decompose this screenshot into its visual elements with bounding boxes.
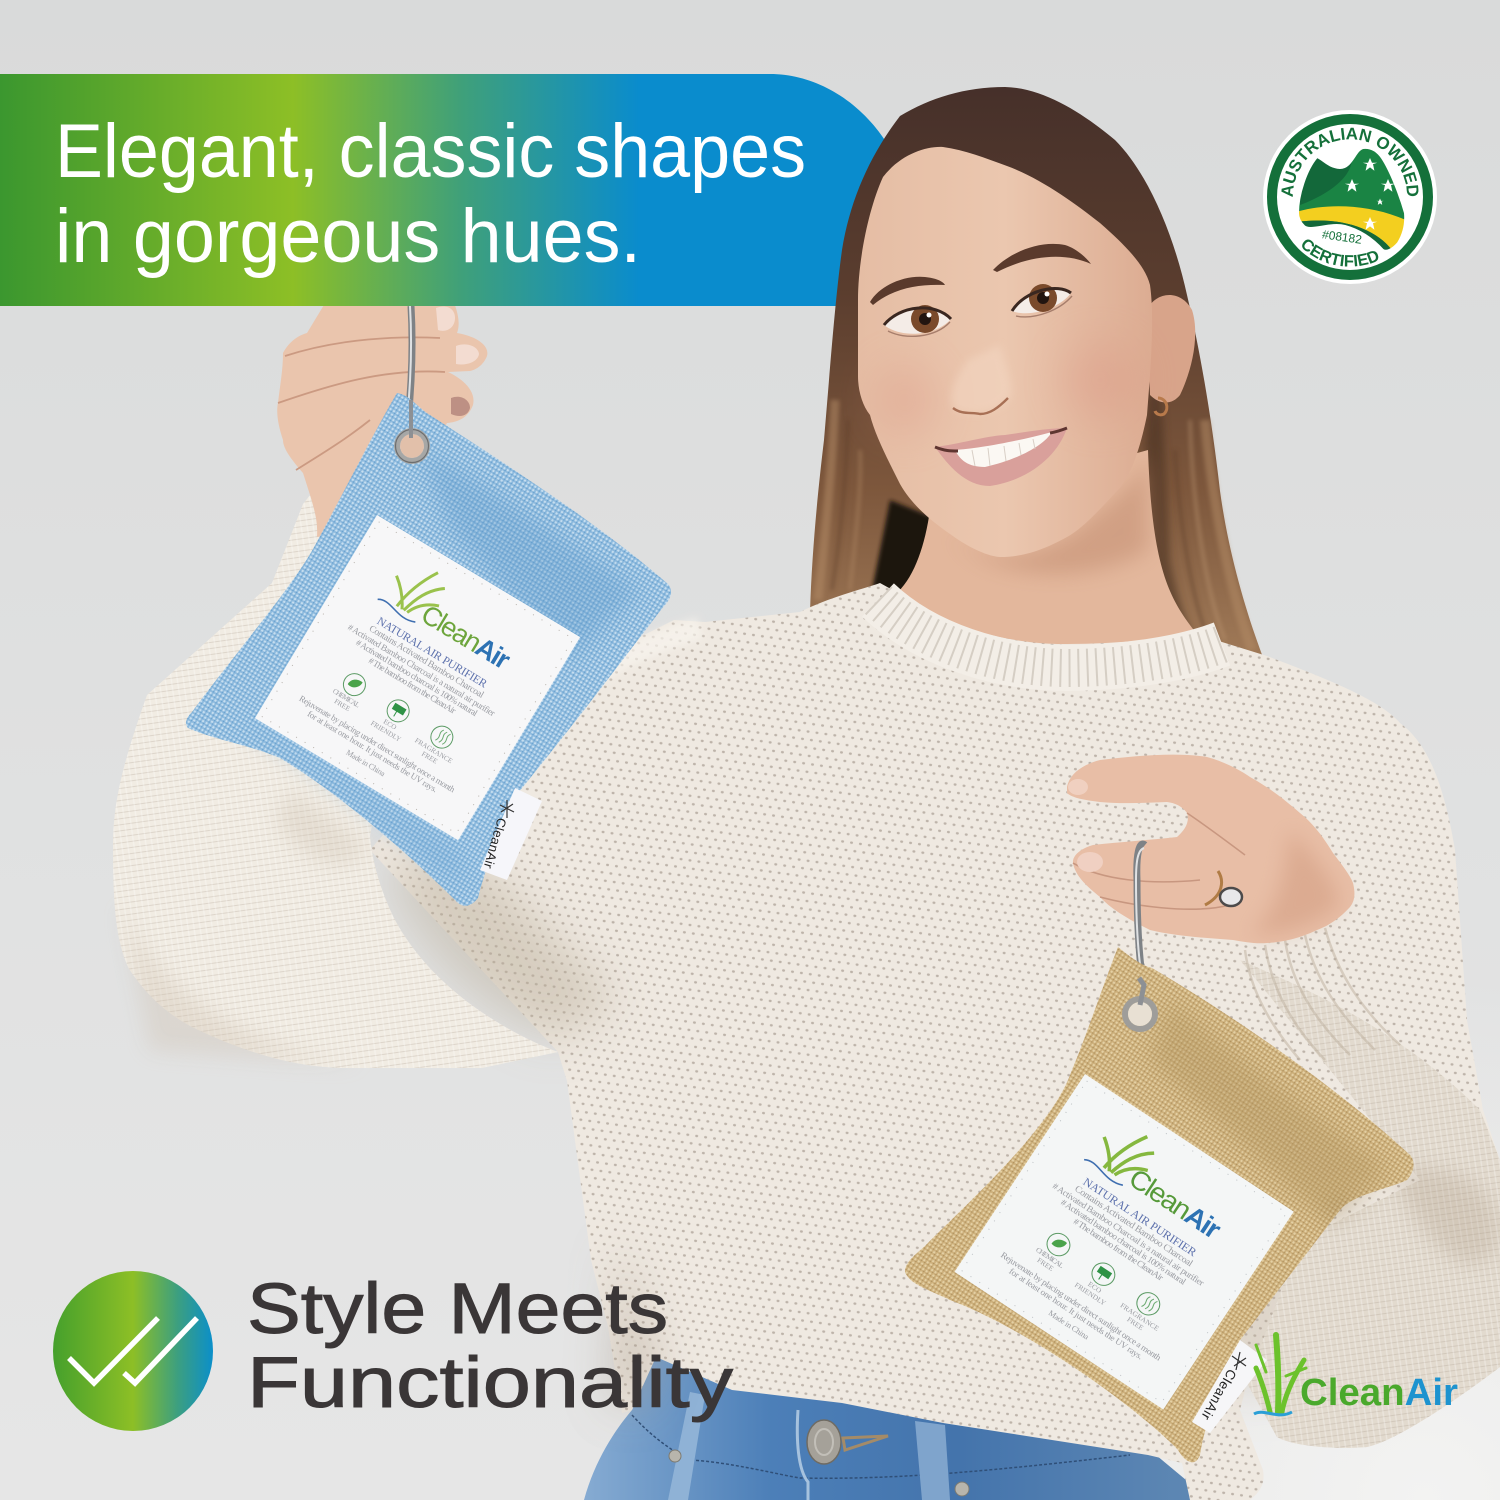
right hand — [1067, 755, 1354, 943]
label logo: CleanAir — [416, 599, 516, 676]
label text — [286, 601, 513, 814]
shoulder highlight — [570, 628, 700, 690]
label text: Made in China — [344, 748, 387, 778]
left hand — [277, 300, 487, 537]
logo water — [1254, 1412, 1292, 1415]
eyebrows — [870, 244, 1091, 305]
eye: left — [884, 305, 951, 336]
label text: # Activated bamboo charcoal is 100% natural — [1059, 1198, 1188, 1288]
belt loops — [668, 1392, 705, 1500]
label text: NATURAL AIR PURIFIER — [375, 615, 489, 691]
badge arc text: AUSTRALIAN OWNED — [1281, 128, 1418, 197]
badge map — [1299, 148, 1404, 250]
nose — [951, 345, 1011, 414]
button — [807, 1420, 841, 1464]
label text: Contains Activated Bamboo Charcoal — [367, 624, 486, 701]
neck — [898, 450, 1197, 646]
tan bag grommet — [1125, 978, 1155, 1029]
blue bag shading — [240, 450, 640, 890]
banner heading: Elegant, classic shapes — [55, 109, 806, 194]
chin shadow — [935, 450, 1148, 574]
blue bag tag: CleanAir — [481, 816, 510, 871]
waistband seam — [632, 1415, 1130, 1478]
callout: Style Meets Functionality — [53, 1270, 734, 1431]
label logo — [1083, 1115, 1241, 1245]
badge arc text — [1281, 128, 1418, 266]
label icons — [339, 670, 457, 752]
banner heading: in gorgeous hues. — [55, 194, 641, 279]
label text: Contains Activated Bamboo Charcoal — [1072, 1184, 1195, 1269]
right sleeve knit — [1240, 960, 1500, 1448]
label text: Rejuvenate by placing under direct sunlight once a month — [999, 1250, 1163, 1363]
label text: ECO — [382, 718, 398, 732]
button loop — [843, 1436, 888, 1450]
fingernails — [436, 306, 455, 331]
label text: # The bamboo from the CleanAir — [367, 655, 458, 716]
jeans — [584, 1355, 1210, 1500]
eye: right — [1012, 284, 1072, 317]
tan bag — [905, 947, 1414, 1462]
label text: # Activated Bamboo Charcoal is a natural air purifier — [1050, 1182, 1205, 1289]
icon: double check — [53, 1271, 213, 1431]
tan bag label — [955, 1074, 1294, 1409]
CleanAir logo — [1254, 1335, 1458, 1415]
banner heading — [55, 109, 806, 279]
label text — [987, 1159, 1223, 1381]
label logo: CleanAir — [1124, 1163, 1227, 1245]
label text: CHEMICAL — [331, 687, 361, 709]
label icons — [1043, 1229, 1164, 1319]
label text: FRIENDLY — [369, 719, 402, 744]
label text: CHEMICAL — [1034, 1246, 1065, 1270]
tan bag tag: CleanAir — [1198, 1366, 1239, 1423]
label text: # The bamboo from the CleanAir — [1071, 1217, 1165, 1283]
label text: FREE — [420, 750, 439, 766]
label text: Rejuvenate by placing under direct sunlight once a month — [297, 693, 457, 795]
label text: FREE — [1125, 1316, 1145, 1332]
label text: FREE — [1036, 1256, 1055, 1273]
face — [858, 147, 1152, 557]
left sleeve — [113, 470, 558, 1068]
label text: FRAGRANCE — [413, 736, 454, 765]
badge arc text: CERTIFIED — [1302, 240, 1378, 266]
body shading — [385, 860, 1299, 1410]
label text: Made in China — [1047, 1309, 1091, 1342]
callout text: Functionality — [247, 1344, 734, 1423]
label text: FRIENDLY — [1073, 1281, 1108, 1308]
ear — [1147, 295, 1195, 402]
tan bag tag — [1192, 1340, 1267, 1433]
ring — [408, 306, 412, 420]
blue bag — [186, 393, 671, 906]
callout text: Style Meets — [247, 1270, 668, 1349]
badge stars — [1345, 158, 1395, 230]
logo bamboo — [1256, 1335, 1306, 1412]
hair — [810, 87, 1264, 660]
label text: FRAGRANCE — [1119, 1302, 1161, 1333]
callout text — [247, 1270, 734, 1423]
label text: FREE — [333, 697, 351, 713]
ring: tan bag hook — [1136, 844, 1145, 985]
badge: Australian Owned Certified — [1263, 110, 1437, 284]
finger creases — [278, 337, 445, 470]
wedding ring — [1205, 871, 1242, 906]
badge number: #08182 — [1321, 227, 1363, 247]
blue bag tag — [480, 788, 542, 880]
banner shape — [0, 74, 888, 306]
fly — [797, 1410, 808, 1500]
tan bag shading — [1150, 1000, 1390, 1225]
sweater collar — [878, 600, 1222, 668]
blue bag label — [255, 515, 580, 840]
label text: # Activated Bamboo Charcoal is a natural air purifier — [346, 622, 497, 718]
label logo — [376, 553, 529, 676]
label text: NATURAL AIR PURIFIER — [1081, 1175, 1199, 1259]
blue bag grommet — [396, 400, 428, 462]
label text: ECO — [1086, 1280, 1103, 1295]
sweater body — [370, 583, 1500, 1500]
banner — [0, 74, 888, 306]
rivets — [669, 1450, 681, 1462]
blue bag body — [186, 393, 671, 906]
earring — [1155, 398, 1167, 415]
label text: for at least one hour. It just needs the UV rays. — [1007, 1266, 1145, 1361]
mouth — [935, 428, 1067, 486]
label text: for at least one hour. It just needs the UV rays. — [306, 709, 439, 794]
sweater — [113, 300, 1500, 1500]
right cuff ribs — [1245, 928, 1400, 1060]
tan bag body — [905, 947, 1414, 1462]
cheek blush — [877, 342, 1136, 435]
label text: # Activated bamboo charcoal is 100% natural — [354, 637, 480, 718]
logo wordmark: CleanAir — [1300, 1372, 1458, 1414]
